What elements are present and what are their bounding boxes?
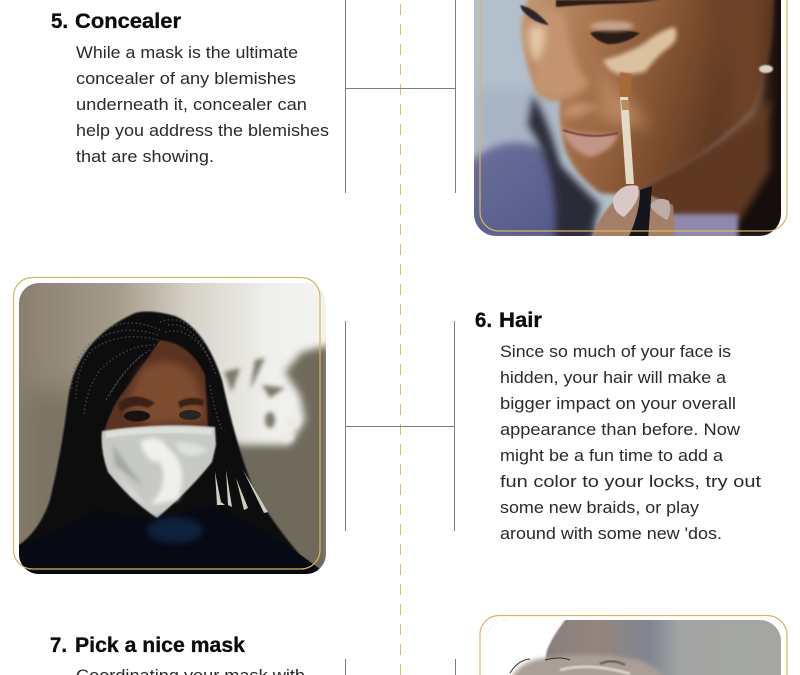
heading: 5. Concealer: Concealer	[75, 10, 181, 33]
body: concealer: While a mask is the ultimate	[76, 44, 298, 62]
surgical mask	[102, 425, 216, 518]
body: hair: appearance than before. Now	[500, 421, 740, 439]
photo: person with curly hair	[479, 614, 788, 675]
body: hair: some new braids, or play	[500, 499, 700, 517]
tip 7: pick a nice mask text	[50, 634, 305, 675]
tip 5: concealer text	[51, 10, 329, 166]
body: concealer: concealer of any blemishes	[76, 70, 296, 88]
body: hair: might be a fun time to add a	[500, 447, 724, 465]
body: hair: around with some new 'dos.	[500, 525, 722, 543]
tip 6: hair text	[475, 309, 761, 543]
heading: 5. Concealer: 5.	[51, 10, 68, 33]
photo: woman with braids wearing a surgical mask	[14, 278, 330, 574]
gold frame	[480, 0, 787, 231]
body: hair: Since so much of your face is	[500, 343, 731, 361]
body: concealer	[76, 44, 329, 166]
heading: 6. Hair: Hair	[499, 309, 542, 332]
heading: 6. Hair: 6.	[475, 309, 492, 332]
heading: 7. Pick a nice mask: Pick a nice mask	[75, 634, 245, 657]
connector: tip 5	[345, 0, 456, 193]
braided hair	[19, 312, 326, 574]
body: hair: hidden, your hair will make a	[500, 369, 727, 387]
heading: 6. Hair	[475, 309, 542, 332]
body: hair	[500, 343, 761, 543]
body: hair: fun color to your locks, try out	[500, 473, 761, 491]
body: concealer: help you address the blemishes	[76, 122, 329, 140]
gold frame	[14, 278, 320, 569]
body: concealer: that are showing.	[76, 148, 214, 166]
connector: tip 6	[345, 321, 455, 531]
body: concealer: underneath it, concealer can	[76, 96, 307, 114]
center dashed timeline	[400, 4, 402, 675]
heading: 7. Pick a nice mask: 7.	[50, 634, 67, 657]
gold frame	[480, 616, 787, 675]
body: hair: bigger impact on your overall	[500, 395, 736, 413]
photo: woman applying concealer	[462, 0, 790, 240]
connector: tip 7	[346, 659, 456, 675]
